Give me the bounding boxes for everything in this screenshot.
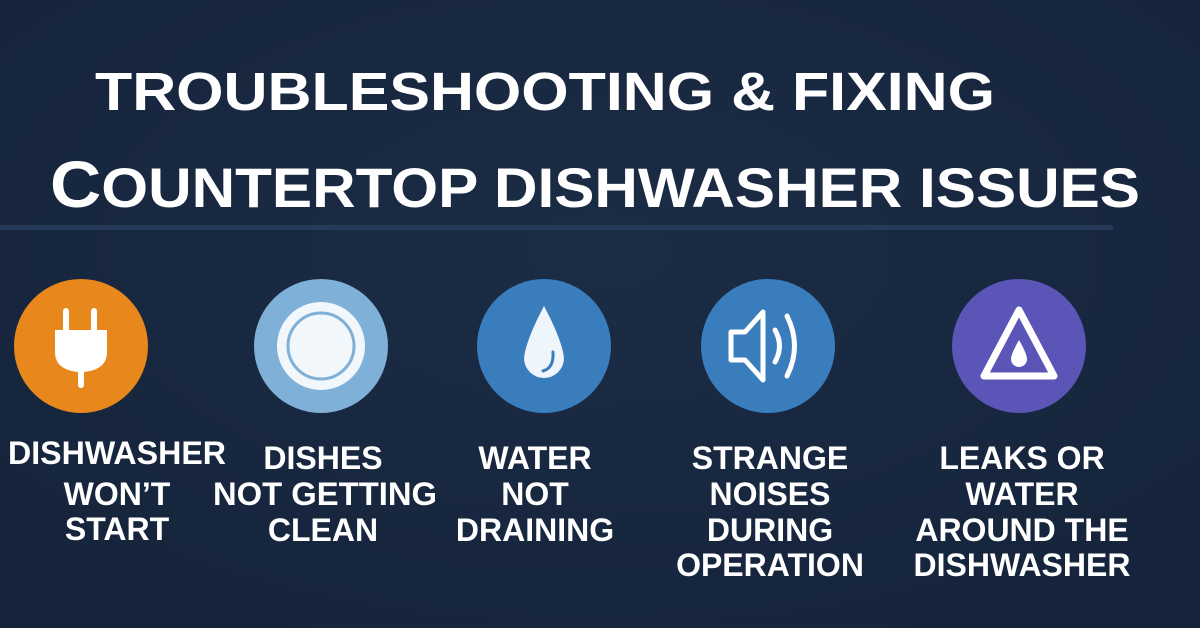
label: noises: NOISES [710,476,830,512]
label: not clean: DISHES [263,440,383,476]
label: won't start: START [65,511,170,547]
title: COUNTERTOP DISHWASHER ISSUES [50,147,1140,221]
label: won't start [8,435,226,547]
icon: plate [254,279,388,413]
label: not draining [456,440,614,548]
label: leaks: DISHWASHER [914,547,1130,583]
title [50,62,1140,221]
icon: plug [14,279,148,413]
icon: warning [952,279,1086,413]
label: leaks [914,440,1130,583]
title: TROUBLESHOOTING & FIXING [95,62,995,122]
label: not clean: CLEAN [268,512,378,548]
label: not draining: WATER [478,440,592,476]
icon: water drop [477,279,611,413]
label: won't start: WON’T [64,476,171,512]
label: not draining: NOT [501,476,569,512]
label: won't start: DISHWASHER [8,435,226,471]
label: noises: DURING [707,512,833,548]
label: leaks: WATER [965,476,1079,512]
label: leaks: AROUND THE [915,512,1129,548]
label: noises: STRANGE [692,440,848,476]
icon: speaker [701,279,835,413]
label: not draining: DRAINING [456,512,614,548]
label: not clean [213,440,437,548]
label: noises: OPERATION [676,547,864,583]
label: not clean: NOT GETTING [213,476,437,512]
label: leaks: LEAKS OR [939,440,1105,476]
label: noises [676,440,864,583]
